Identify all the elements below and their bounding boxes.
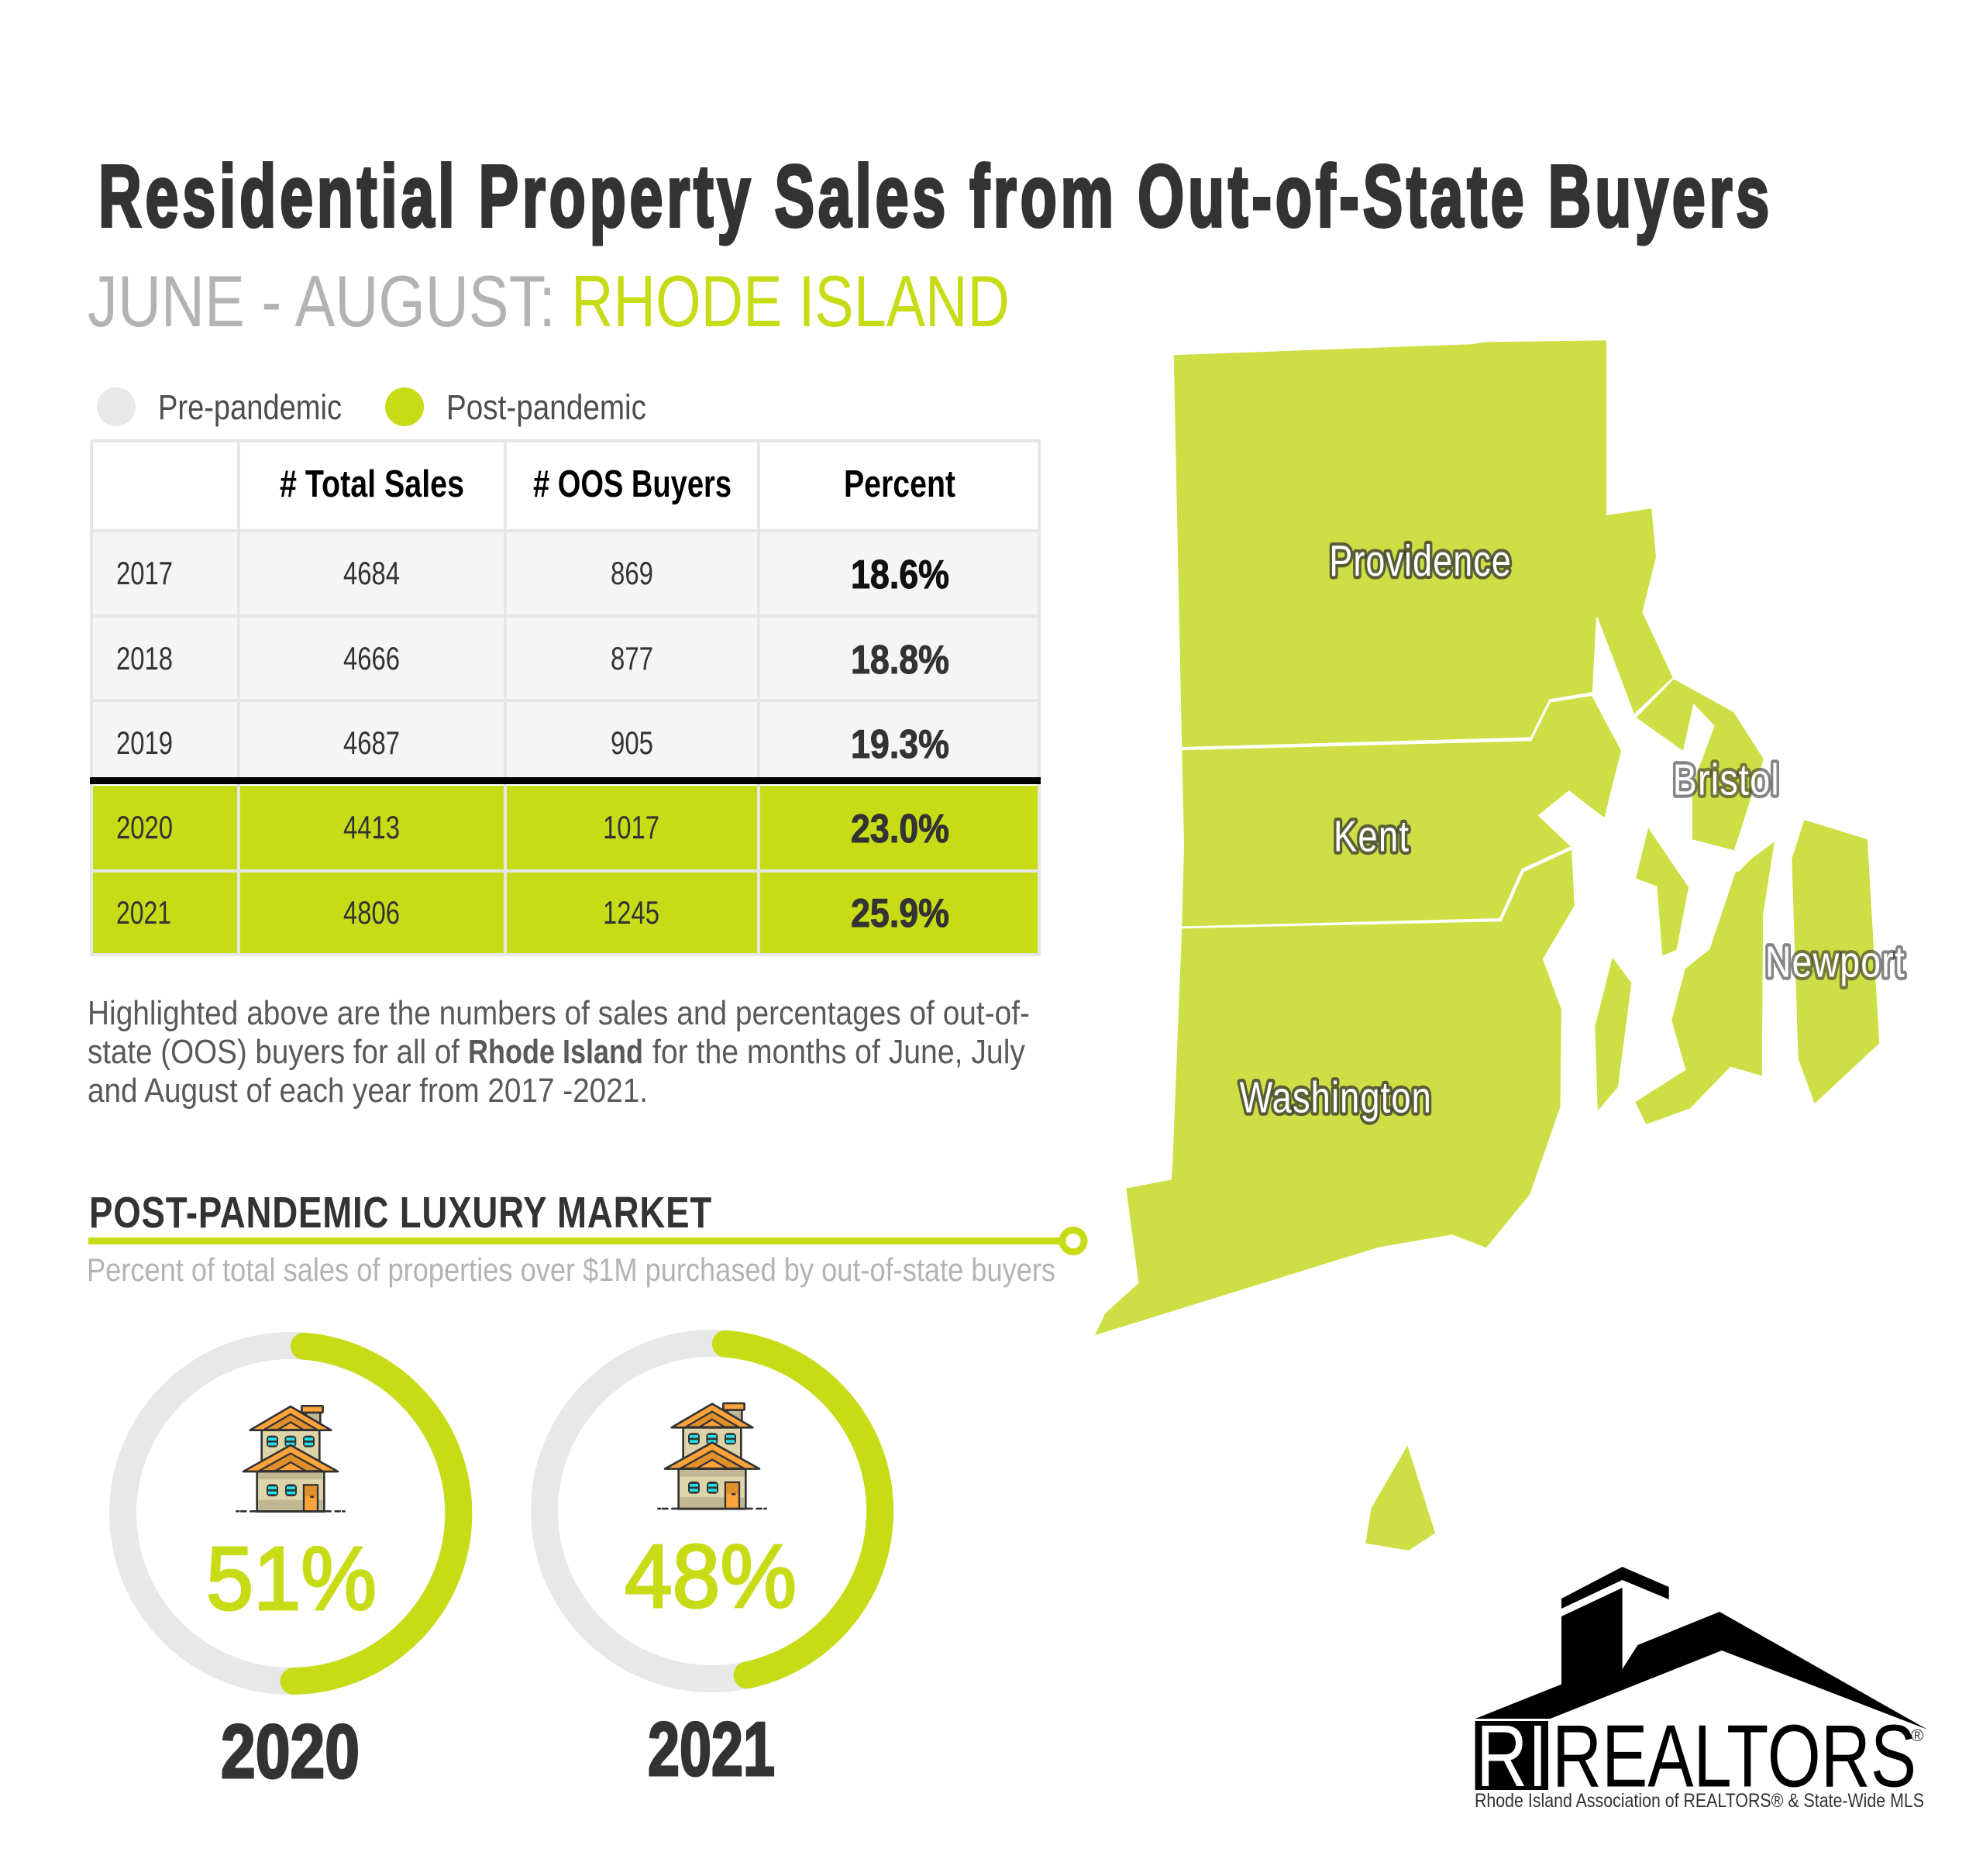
logo: RI Realtors [1475,1567,1928,1812]
description paragraph: and August of each year from 2017 -2021. [88,1072,648,1110]
map of Rhode Island counties [1095,340,1905,1551]
row 2017: 869 [611,555,653,591]
heading rule with end ring [88,1231,1084,1252]
row 2020: 1017 [603,809,659,845]
table header [280,463,955,505]
value 48%: 48% [625,1526,797,1626]
legend [97,387,646,427]
county: Washington [1095,850,1575,1335]
row 2021: 2021 [116,894,171,931]
row 2018: 4666 [343,640,400,676]
label: Bristol: Bristol [1673,756,1780,804]
data table [90,439,1041,956]
description paragraph: for the months of June, July [652,1033,1025,1071]
row 2020 [116,807,949,852]
row 2021: 4806 [343,894,400,931]
county: Providence [1174,340,1673,747]
label: Kent: Kent [1334,812,1410,861]
row 2019 [116,722,949,767]
value 51%: 51% [206,1528,377,1629]
row 2021: 25.9% [851,891,949,936]
icon: chimney cap [1561,1567,1669,1609]
row 2019: 905 [611,725,653,761]
donut 2021 [544,1344,880,1678]
subtitle: JUNE - AUGUST: [88,260,556,342]
county: Newport east [1792,820,1879,1103]
year label 2020: 2020 [221,1709,360,1794]
donut 2020 [122,1345,459,1682]
label: Providence: Providence [1329,536,1512,585]
label: Newport: Newport [1765,938,1905,986]
row 2021 [116,891,949,936]
row 2019: 4687 [343,725,400,761]
county: Kent [1182,696,1621,927]
row 2018: 2018 [116,640,173,676]
table header: # Total Sales [280,463,464,505]
icon: house 2020 [236,1406,345,1512]
subtitle [88,260,1010,342]
description paragraph: Highlighted above are the numbers of sales and percentages of out-of- [88,994,1030,1032]
row 2018: 18.8% [851,638,949,683]
luxury market subtitle: Percent of total sales of properties over $1M purchased by out-of-state buyers [87,1251,1055,1288]
legend: Post-pandemic [446,387,646,427]
row 2020: 2020 [116,809,173,845]
legend: Pre-pandemic [158,387,342,427]
Prudence Island [1636,828,1689,955]
description paragraph: Rhode Island [468,1033,643,1071]
row 2019: 2019 [116,725,173,761]
county: Bristol [1637,679,1764,850]
row 2018 [116,638,949,683]
table header: Percent [844,463,955,505]
subtitle: RHODE ISLAND [571,260,1010,342]
RI box: RI [1476,1707,1547,1805]
description paragraph: state (OOS) buyers for all of [88,1033,460,1071]
row 2017 [116,552,949,597]
label: Washington: Washington [1240,1072,1432,1121]
row 2017: 18.6% [851,552,949,597]
luxury market heading: POST-PANDEMIC LUXURY MARKET [89,1188,712,1237]
Block Island [1365,1445,1435,1551]
description paragraph [88,994,1030,1110]
year label 2021: 2021 [648,1706,775,1792]
row 2020: 4413 [343,809,400,845]
row 2020: 23.0% [851,807,949,852]
row 2018: 877 [611,640,653,676]
registered mark: ® [1911,1726,1923,1745]
row 2017: 4684 [343,555,400,591]
Aquidneck Island [1635,842,1775,1124]
row 2017: 2017 [116,555,173,591]
icon: roof and chimney [1475,1588,1928,1730]
row 2019: 19.3% [851,722,949,767]
row 2021: 1245 [603,894,659,931]
icon: house 2021 [658,1403,766,1509]
Conanicut Island [1595,957,1631,1110]
table header: # OOS Buyers [533,463,732,505]
